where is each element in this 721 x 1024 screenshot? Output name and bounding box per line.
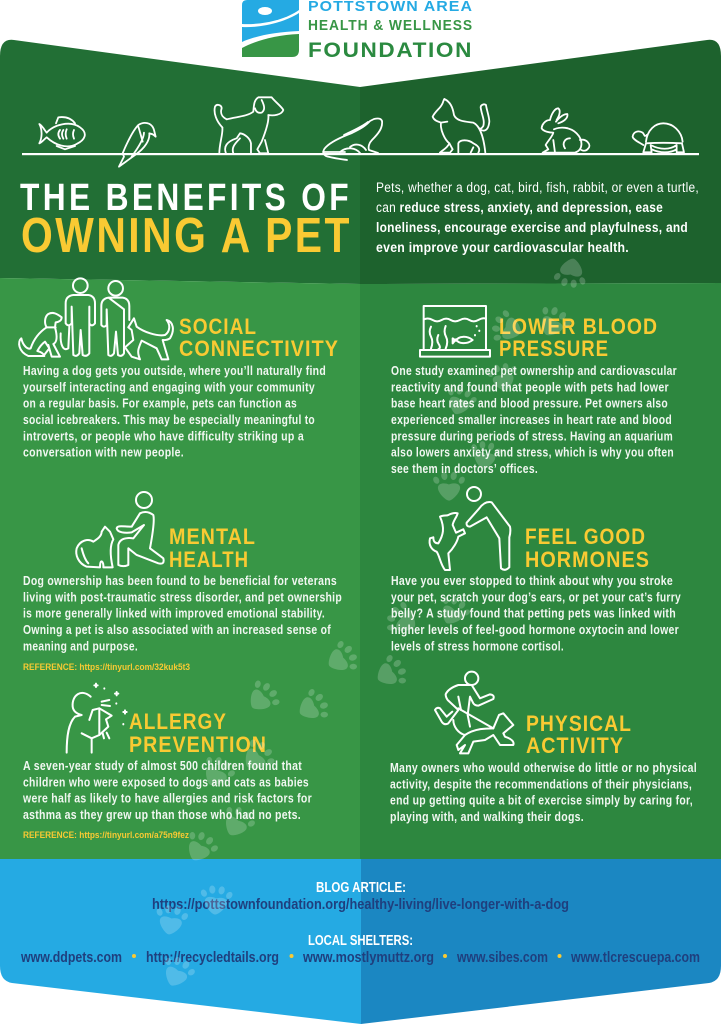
logo wordmark	[308, 0, 473, 62]
heading: PRESSURE	[499, 336, 609, 361]
heading	[179, 314, 339, 361]
icon: aquarium	[420, 306, 490, 357]
title: THE BENEFITS OF	[20, 177, 352, 219]
body text	[391, 364, 677, 476]
intro paragraph: even improve your cardiovascular health.	[376, 240, 629, 255]
body text	[391, 574, 681, 653]
footer: local shelters: www.tlcrescuepa.com	[570, 950, 700, 966]
panel: allergy prevention	[22, 684, 312, 841]
paw print watermarks	[152, 256, 590, 993]
panel: benefits left background	[0, 278, 360, 860]
body text: see them in doctors’ offices.	[391, 462, 538, 476]
body text: were half as likely to have allergies and risk factors for	[22, 792, 312, 806]
panel: lower blood pressure	[391, 306, 677, 476]
icon: dog	[215, 97, 283, 153]
body text: levels of stress hormone cortisol.	[391, 639, 564, 653]
heading: PREVENTION	[129, 732, 267, 757]
panel: physical activity	[390, 672, 697, 824]
body text: reactivity and found that people with pets had lower	[391, 380, 669, 394]
body text: base heart rates and blood pressure. Pet owners also	[391, 397, 668, 411]
body text: conversation with new people.	[23, 446, 184, 460]
body text	[23, 574, 342, 653]
footer: local shelters: www.mostlymuttz.org	[302, 950, 434, 966]
footer: blog article: BLOG ARTICLE:	[316, 880, 406, 896]
heading	[526, 711, 632, 758]
heading	[169, 524, 256, 572]
footer: blog article: https://pottstownfoundation.org/healthy-living/live-longer-with-a-dog	[152, 897, 569, 913]
intro paragraph: can reduce stress, anxiety, and depression, ease	[376, 200, 663, 215]
icon: person kneeling with cat	[76, 492, 164, 567]
footer: local shelters: www.sibes.com	[456, 950, 548, 966]
body text: belly? A study found that petting pets was linked with	[391, 607, 676, 621]
panel: social connectivity	[19, 278, 339, 460]
pets row	[22, 97, 699, 167]
body text: Having a dog gets you outside, where you’ll naturally find	[23, 364, 326, 378]
panel: mental health	[23, 492, 342, 673]
panel: footer right background	[361, 859, 721, 1024]
icon: cat	[433, 99, 489, 153]
heading: ALLERGY	[129, 709, 227, 734]
intro paragraph	[376, 180, 699, 255]
panel: feel good hormones	[391, 487, 681, 653]
body text	[23, 364, 326, 460]
heading: MENTAL	[169, 524, 256, 549]
logo wordmark: FOUNDATION	[308, 39, 473, 62]
body text: meaning and purpose.	[23, 639, 138, 653]
body text: yourself interacting and engaging with your community	[23, 380, 315, 394]
logo	[242, 0, 473, 62]
body text: social icebreakers. This may be especially meaningful to	[23, 413, 315, 427]
body text	[22, 759, 312, 822]
panel: header right background	[360, 40, 721, 284]
icon: turtle	[633, 123, 684, 152]
panel: header left background	[0, 40, 360, 284]
body text: A seven-year study of almost 500 children found that	[23, 759, 302, 773]
heading: PHYSICAL	[526, 711, 632, 736]
title: OWNING A PET	[21, 209, 352, 263]
body text: introverts, or people who have difficulty striking up a	[23, 429, 305, 443]
title	[20, 177, 352, 263]
reference link: REFERENCE: https://tinyurl.com/a75n9fez	[23, 830, 189, 841]
heading: HEALTH	[169, 547, 249, 572]
panel: benefits right background	[360, 283, 721, 860]
footer: local shelters: www.ddpets.com	[20, 950, 122, 966]
intro paragraph: loneliness, encourage exercise and playfulness, and	[376, 220, 688, 235]
icon: two people with dogs	[19, 278, 173, 359]
body text: asthma as they grew up than those who had no pets.	[23, 808, 301, 822]
body text: living with post-traumatic stress disorder, and pet ownership	[23, 590, 342, 604]
footer: local shelters: http://recycledtails.org	[146, 950, 279, 966]
icon: person sneezing	[67, 684, 127, 753]
heading: ACTIVITY	[526, 733, 624, 758]
icon: iguana	[323, 118, 382, 160]
body text: playing with, and walking their dogs.	[390, 810, 584, 824]
panel: footer left background	[0, 859, 361, 1024]
heading: CONNECTIVITY	[179, 336, 339, 361]
heading	[129, 709, 267, 757]
icon: rabbit	[542, 108, 589, 153]
footer: blog article	[152, 880, 569, 913]
body text: children who were exposed to dogs and cats as babies	[23, 775, 309, 789]
body text: on a regular basis. For example, pets can function as	[23, 397, 297, 411]
reference link: REFERENCE: https://tinyurl.com/32kuk5t3	[23, 662, 190, 673]
heading	[499, 314, 658, 361]
ground line	[22, 153, 699, 155]
body text: Have you ever stopped to think about why you stroke	[391, 574, 673, 588]
heading: FEEL GOOD	[525, 524, 646, 549]
icon: person petting jumping dog	[430, 487, 510, 570]
logo mark	[242, 0, 299, 57]
body text: Dog ownership has been found to be beneficial for veterans	[23, 574, 337, 588]
body text: Owning a pet is also associated with an increased sense of	[23, 623, 331, 637]
icon: person running with dog	[435, 672, 514, 753]
heading: SOCIAL	[179, 314, 257, 339]
heading: LOWER BLOOD	[499, 314, 658, 339]
heading	[525, 524, 650, 572]
body text	[390, 761, 697, 824]
body text: is more generally linked with improved emotional stability.	[23, 607, 325, 621]
footer: local shelters: LOCAL SHELTERS:	[308, 933, 413, 949]
icon: fish	[39, 117, 85, 149]
icon: parrot	[119, 123, 156, 167]
logo wordmark: HEALTH & WELLNESS	[308, 17, 473, 34]
footer: local shelters	[20, 933, 700, 966]
heading: HORMONES	[525, 547, 650, 572]
